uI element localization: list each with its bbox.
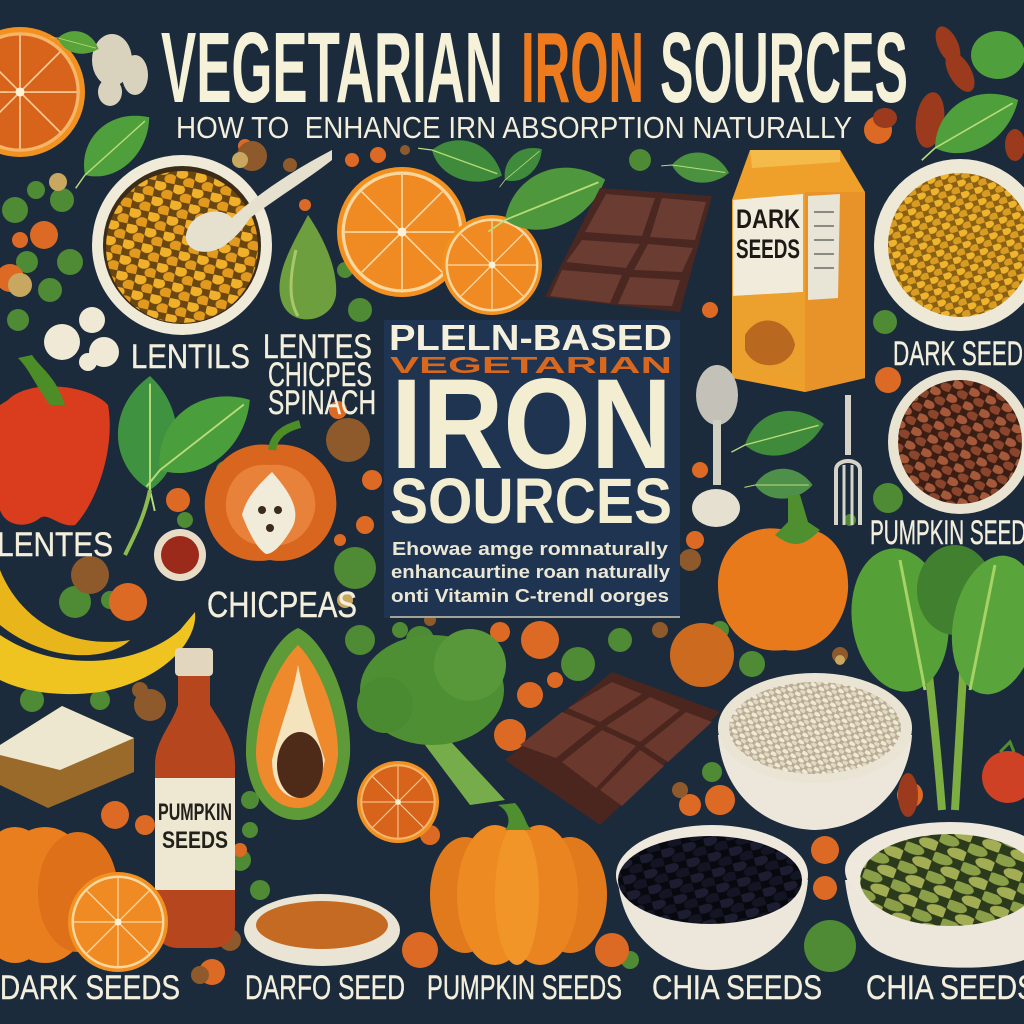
label: chicpeas: CHICPEAS [207, 584, 357, 625]
icon: orange bell pepper [718, 495, 848, 651]
title: VEGETARIAN [161, 12, 503, 124]
icon: spinach bunch right [842, 542, 1024, 810]
label: dark seeds bottom: DARK SEEDS [0, 969, 180, 1007]
heading: vegetarian: VEGETARIAN [390, 352, 672, 378]
label: lentes left: LENTES [0, 526, 113, 564]
carton label text: SEEDS [736, 234, 800, 264]
food labels [0, 328, 1024, 1007]
icon: small leaf top left [48, 25, 102, 59]
icon: tofu block [0, 706, 134, 808]
label: darfo seed: DARFO SEED [245, 969, 405, 1007]
icon: pumpkin center [430, 803, 607, 965]
label: pumpkin seeds bottom: PUMPKIN SEEDS [427, 969, 622, 1007]
icon: brown bean bowl right [888, 370, 1024, 514]
icon: yellow seed bowl right [874, 159, 1024, 331]
icon: spoon [692, 365, 740, 527]
icon: fork [836, 395, 860, 525]
icon: sauce bottle [155, 648, 235, 948]
icon: right top leaves [906, 31, 1024, 177]
icon: chocolate bar top [545, 188, 712, 312]
label: chia seeds: CHIA SEEDS [652, 969, 822, 1007]
label: lentes: LENTES [263, 328, 372, 366]
carton label text: DARK [736, 204, 800, 234]
text block: description [391, 539, 670, 606]
label: lentils: LENTILS [131, 338, 250, 376]
label: chicpes: CHICPES [268, 356, 372, 394]
icon: black bean bowl [616, 825, 808, 970]
icon: orange half large [337, 167, 467, 297]
text block: description: onti Vitamin C-trendl oorges [391, 586, 669, 606]
icon: leaves near fork [725, 402, 829, 499]
panel: central title [384, 317, 680, 618]
icon: papaya half [246, 628, 350, 820]
title: IRON [521, 12, 644, 124]
icon: tomato [982, 742, 1024, 803]
icon: top leaves [413, 126, 731, 251]
label: spinach: SPINACH [268, 384, 376, 422]
heading: iron: IRON [391, 353, 672, 496]
icon: white stones [92, 34, 148, 106]
icon: rice bowl [718, 673, 912, 830]
bottle label text [158, 799, 232, 854]
icon: pumpkin left [0, 827, 118, 963]
text block: description: enhancaurtine roan naturally [391, 562, 670, 582]
icon: milk carton with label [732, 150, 865, 392]
icon: chocolate bar lower [505, 672, 720, 825]
icon: cut orange pepper [205, 424, 336, 561]
icon: pumpkin seed bowl [845, 822, 1024, 968]
bottle label text: PUMPKIN [158, 799, 232, 826]
text block: description: Ehowae amge romnaturally [392, 539, 668, 559]
subtitle: HOW TO ENHANCE IRN ABSORPTION NATURALLY [176, 110, 852, 145]
icon: whole orange fruit [670, 623, 734, 687]
icon: small orange slice [357, 761, 439, 843]
icon: spiced food bowl [244, 894, 400, 966]
icon: spinach leaves left [118, 375, 267, 555]
carton label text [736, 204, 800, 264]
heading: plant-based: PLELN-BASED [389, 317, 672, 358]
icon: orange half bottom left [68, 872, 168, 972]
bottle label text: SEEDS [162, 827, 228, 854]
icon: small sauce bowl [154, 529, 206, 581]
icon: lentil bowl with spoon [92, 150, 332, 335]
icon: spinach leaf top [57, 99, 163, 201]
icon: avocado [279, 215, 336, 319]
heading: sources: SOURCES [390, 465, 672, 537]
icon: orange slice top left [0, 27, 85, 157]
icon: bananas [0, 570, 195, 694]
icon: broccoli [357, 629, 506, 805]
icon: red bell pepper [0, 355, 110, 525]
icon: orange half small [442, 215, 542, 315]
